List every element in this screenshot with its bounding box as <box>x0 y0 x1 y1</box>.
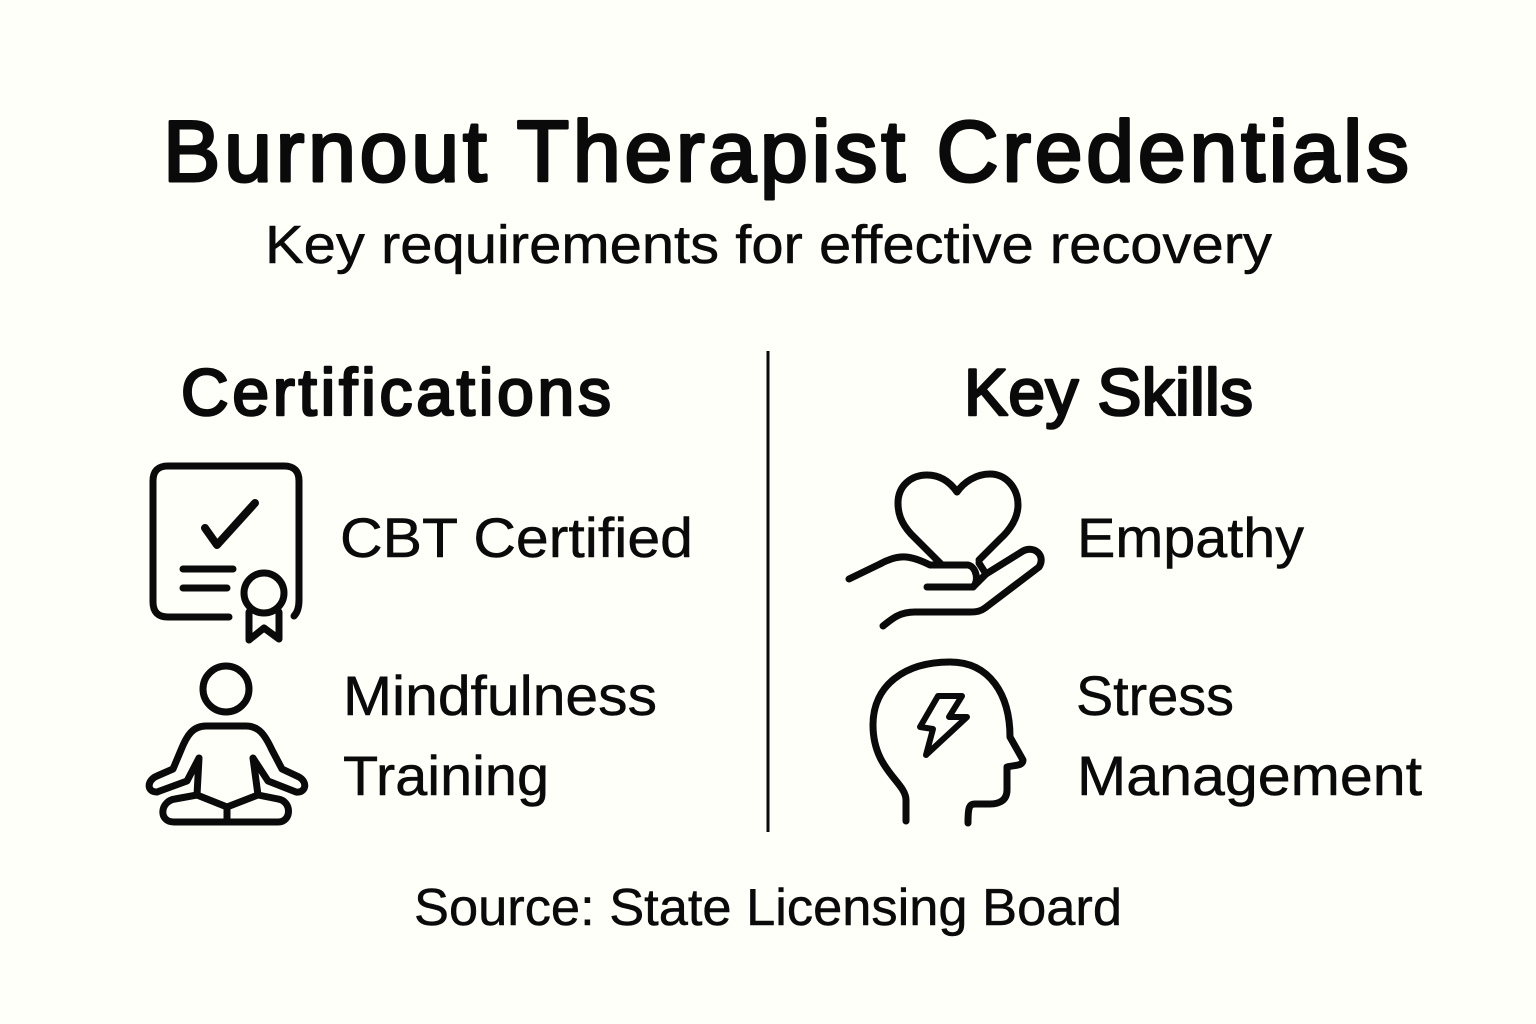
label: mindfulness training: Mindfulness <box>343 664 657 727</box>
icon: meditating person <box>149 666 305 822</box>
label: CBT certified: CBT Certified <box>340 506 693 569</box>
heading: key skills: Key Skills <box>964 355 1253 429</box>
label: mindfulness training <box>343 664 657 807</box>
icon: heart in hand <box>849 474 1041 626</box>
label: stress management: Stress <box>1076 664 1234 727</box>
source note: Source: State Licensing Board <box>414 879 1122 937</box>
label: empathy: Empathy <box>1077 506 1304 569</box>
heading: certifications: Certifications <box>181 355 611 429</box>
icon: head with lightning bolt <box>873 662 1023 823</box>
label: stress management: Management <box>1077 744 1422 807</box>
label: stress management <box>1076 664 1422 807</box>
icon: certificate <box>153 466 299 640</box>
subtitle: Key requirements for effective recovery <box>265 215 1272 275</box>
title: Burnout Therapist Credentials <box>163 104 1409 200</box>
label: mindfulness training: Training <box>343 744 549 807</box>
